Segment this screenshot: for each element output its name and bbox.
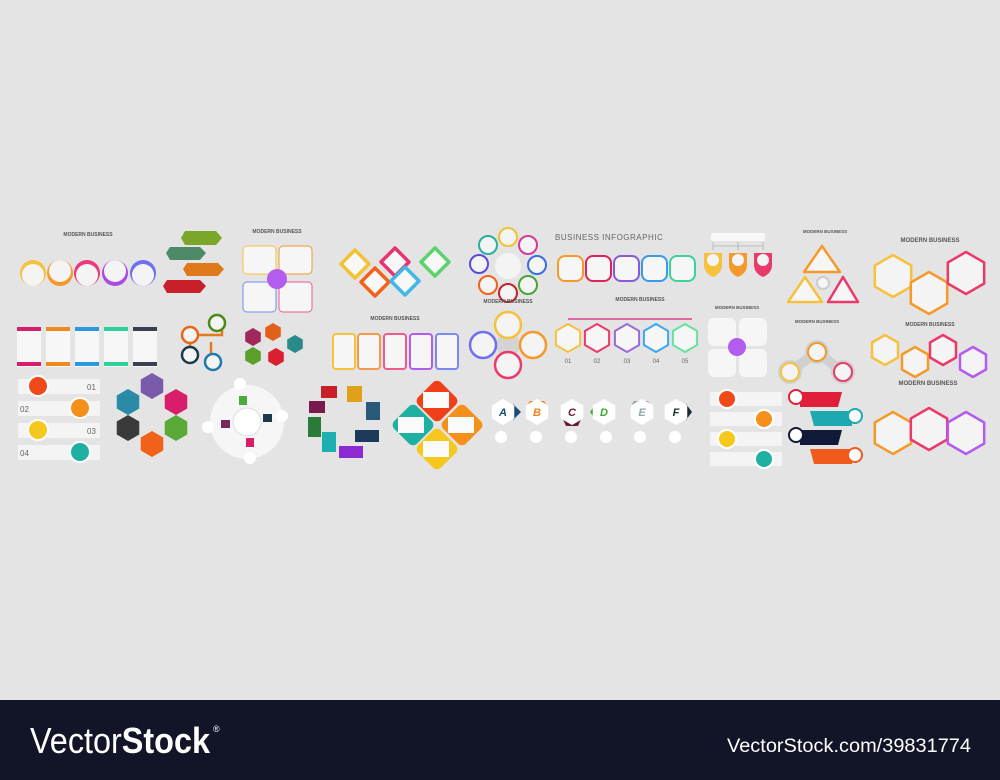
panel: three linked circles: MODERN BUSINESS bbox=[795, 319, 839, 324]
panel: ribbons bbox=[789, 390, 862, 464]
panel: flower bbox=[708, 305, 767, 377]
panel: hexagons bottom right bbox=[875, 381, 984, 454]
panel: ABCDEF hexagons: D bbox=[600, 407, 608, 419]
panel: ABCDEF hexagons: B bbox=[533, 407, 541, 419]
panel: three linked circles bbox=[778, 319, 855, 384]
panel: hexagons top right: MODERN BUSINESS bbox=[900, 238, 960, 244]
panel: triangles: MODERN BUSINESS bbox=[803, 229, 847, 234]
panel: circle wheel bbox=[202, 378, 288, 464]
panel: connected circles bbox=[182, 315, 225, 370]
panel: numbered list left: 03 bbox=[87, 427, 96, 436]
panel: org chart drops bbox=[704, 233, 772, 277]
panel: five cards: MODERN BUSINESS bbox=[370, 316, 420, 322]
panel: ABCDEF hexagons: F bbox=[673, 407, 680, 419]
panel: four cards with purple circle bbox=[243, 229, 312, 312]
panel: hexagon timeline bbox=[556, 319, 697, 365]
panel: hexagon timeline: 03 bbox=[624, 359, 631, 365]
panel: four circles bbox=[470, 312, 546, 378]
logo: VectorStock bbox=[30, 720, 211, 761]
panel: four cards with purple circle: MODERN BUSINESS bbox=[252, 229, 302, 235]
panel: hexagon timeline: 05 bbox=[682, 359, 689, 365]
panel: numbered list left: 02 bbox=[20, 405, 29, 414]
panel: arrow banners bbox=[163, 231, 224, 293]
panel: ABCDEF hexagons: C bbox=[568, 407, 577, 419]
panel: folded squares bbox=[308, 386, 380, 458]
panel: hexagon ring bbox=[117, 373, 187, 457]
panel: circular ring: MODERN BUSINESS bbox=[483, 299, 533, 305]
panel: numbered list right bbox=[710, 390, 782, 468]
panel: large diamonds bbox=[390, 378, 485, 472]
url: VectorStock.com/39831774 bbox=[727, 736, 971, 757]
panel: hexagons bottom right: MODERN BUSINESS bbox=[898, 381, 958, 387]
panel: hexagon timeline: 04 bbox=[653, 359, 660, 365]
panel: circles row: MODERN BUSINESS bbox=[63, 232, 113, 238]
panel: hexagon timeline: 02 bbox=[594, 359, 601, 365]
collage of infographics bbox=[17, 228, 986, 472]
panel: business infographic cards: BUSINESS INFOGRAPHIC bbox=[555, 233, 663, 242]
panel: business infographic cards bbox=[555, 233, 695, 303]
panel: five cards bbox=[333, 316, 458, 369]
footer bar bbox=[0, 700, 1000, 780]
panel: ABCDEF hexagons bbox=[492, 399, 692, 443]
panel: rounded diamonds bbox=[341, 248, 449, 296]
panel: numbered list left bbox=[18, 376, 100, 462]
panel: vertical cards row bbox=[17, 327, 157, 367]
panel: hexagons top right bbox=[875, 238, 984, 314]
panel: numbered list left: 04 bbox=[20, 449, 29, 458]
panel: small hexagon cluster bbox=[245, 323, 303, 366]
panel: hexagons middle right: MODERN BUSINESS bbox=[905, 322, 955, 328]
panel: circular ring bbox=[470, 228, 546, 305]
panel: business infographic cards: MODERN BUSINESS bbox=[615, 297, 665, 303]
panel: numbered list left: 01 bbox=[87, 383, 96, 392]
panel: ABCDEF hexagons: E bbox=[638, 407, 646, 419]
panel: ABCDEF hexagons: A bbox=[498, 407, 507, 419]
footer bar: ® bbox=[213, 724, 220, 734]
panel: flower: MODERN BUSINESS bbox=[715, 305, 759, 310]
panel: hexagons middle right bbox=[872, 322, 986, 377]
panel: circles row bbox=[20, 232, 156, 286]
panel: hexagon timeline: 01 bbox=[565, 359, 572, 365]
panel: triangles bbox=[788, 229, 858, 302]
